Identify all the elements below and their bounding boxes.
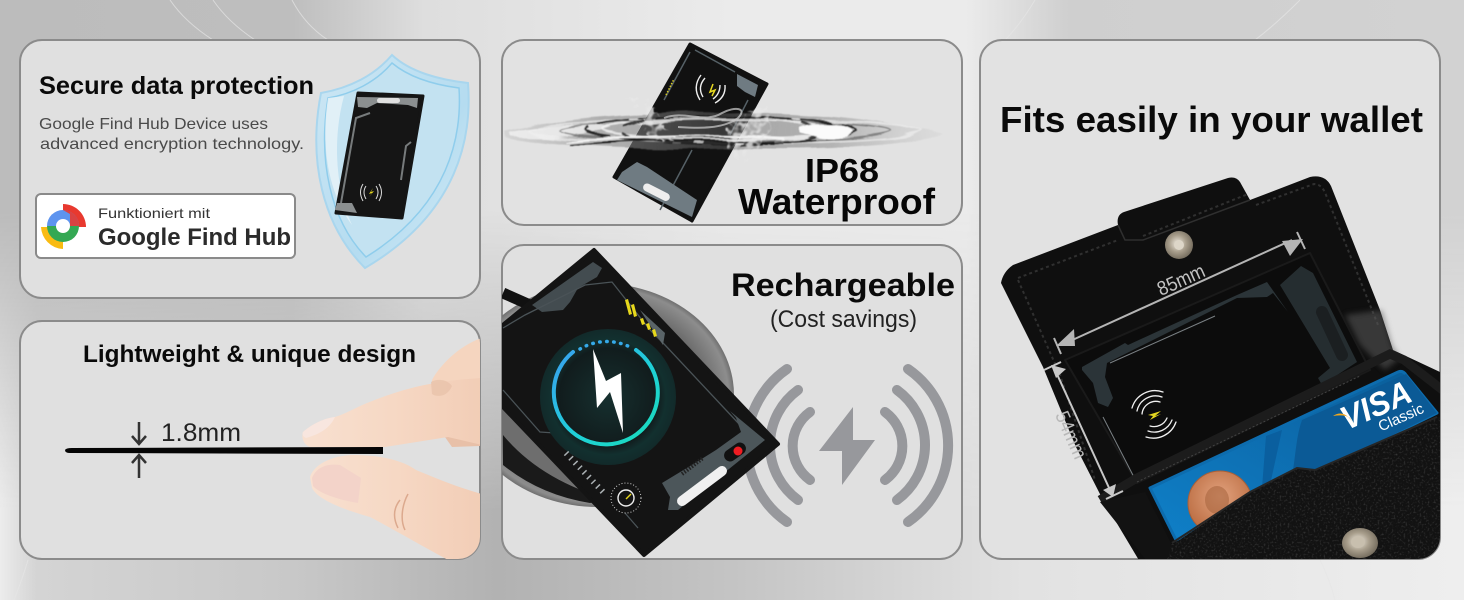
heading: fits easily in your wallet: Fits easily in your wallet: [1000, 99, 1423, 140]
heading: IP68 waterproof: IP68: [805, 152, 879, 189]
label: Visa Classic logo: VISA: [1334, 373, 1417, 437]
illustration: open black wallet: [1001, 176, 1445, 565]
text block: encryption description: advanced encryption technology.: [40, 136, 304, 153]
badge: Google Find Hub: Google Find Hub: [98, 224, 291, 251]
heading: rechargeable: Rechargeable: [731, 267, 955, 303]
label: 1.8mm: 1.8mm: [161, 419, 241, 447]
text block: cost savings: (Cost savings): [770, 306, 917, 333]
panel: secure data protection: [20, 40, 480, 298]
illustration: card splashing in water: [505, 44, 943, 221]
icon: blue glass shield with card: [316, 55, 469, 268]
text block: encryption description: [39, 116, 304, 153]
illustration: front leather pocket: [1100, 415, 1445, 565]
badge: Google Find Hub: Funktioniert mit: [98, 205, 210, 221]
panel: rechargeable: [459, 245, 962, 559]
badge: Google Find Hub: [36, 194, 295, 258]
label: Visa Classic logo: Classic: [1376, 400, 1427, 435]
illustration: water splash: [644, 106, 771, 150]
heading: IP68 waterproof: Waterproof: [738, 181, 936, 222]
heading: lightweight and unique design: Lightweight & unique design: [83, 341, 416, 368]
label: Visa Classic logo: [1340, 382, 1424, 430]
icon: white lightning bolt: [593, 349, 623, 433]
illustration: charging pad and card: [502, 248, 780, 558]
illustration: card edge: [65, 447, 383, 454]
dimension: 85mm arrow: [1054, 232, 1305, 354]
text block: encryption description: Google Find Hub Device uses: [39, 116, 268, 133]
heading: secure data protection: Secure data protection: [39, 72, 314, 100]
icon: wireless charging waves: [747, 369, 948, 522]
panel: waterproof: [502, 40, 962, 225]
illustration: card inside wallet: [1065, 253, 1370, 483]
icon: wallet top snap: [1165, 231, 1193, 259]
illustration: blue Visa card: [1150, 371, 1437, 540]
arrow: thickness up arrow: [132, 455, 146, 478]
dimension: 54mm arrow: 54mm: [1050, 408, 1091, 463]
icon: charging ring: [540, 329, 676, 465]
arrow: thickness down arrow: [132, 422, 146, 444]
panel: fits in wallet: [980, 40, 1445, 565]
heading: IP68 waterproof: [738, 152, 936, 222]
icon: Google Find Hub logo: [41, 204, 86, 249]
icon: hand pinching card: [302, 338, 482, 562]
icon: wallet lower snap: [1342, 528, 1378, 558]
dimension: 54mm arrow: [1044, 362, 1123, 499]
illustration: copper coin: [1188, 470, 1250, 528]
dimension: 85mm arrow: 85mm: [1154, 260, 1209, 301]
illustration: water ripples: [505, 113, 943, 149]
panel: lightweight and unique design: [20, 321, 482, 562]
icon: power button: [611, 483, 641, 513]
